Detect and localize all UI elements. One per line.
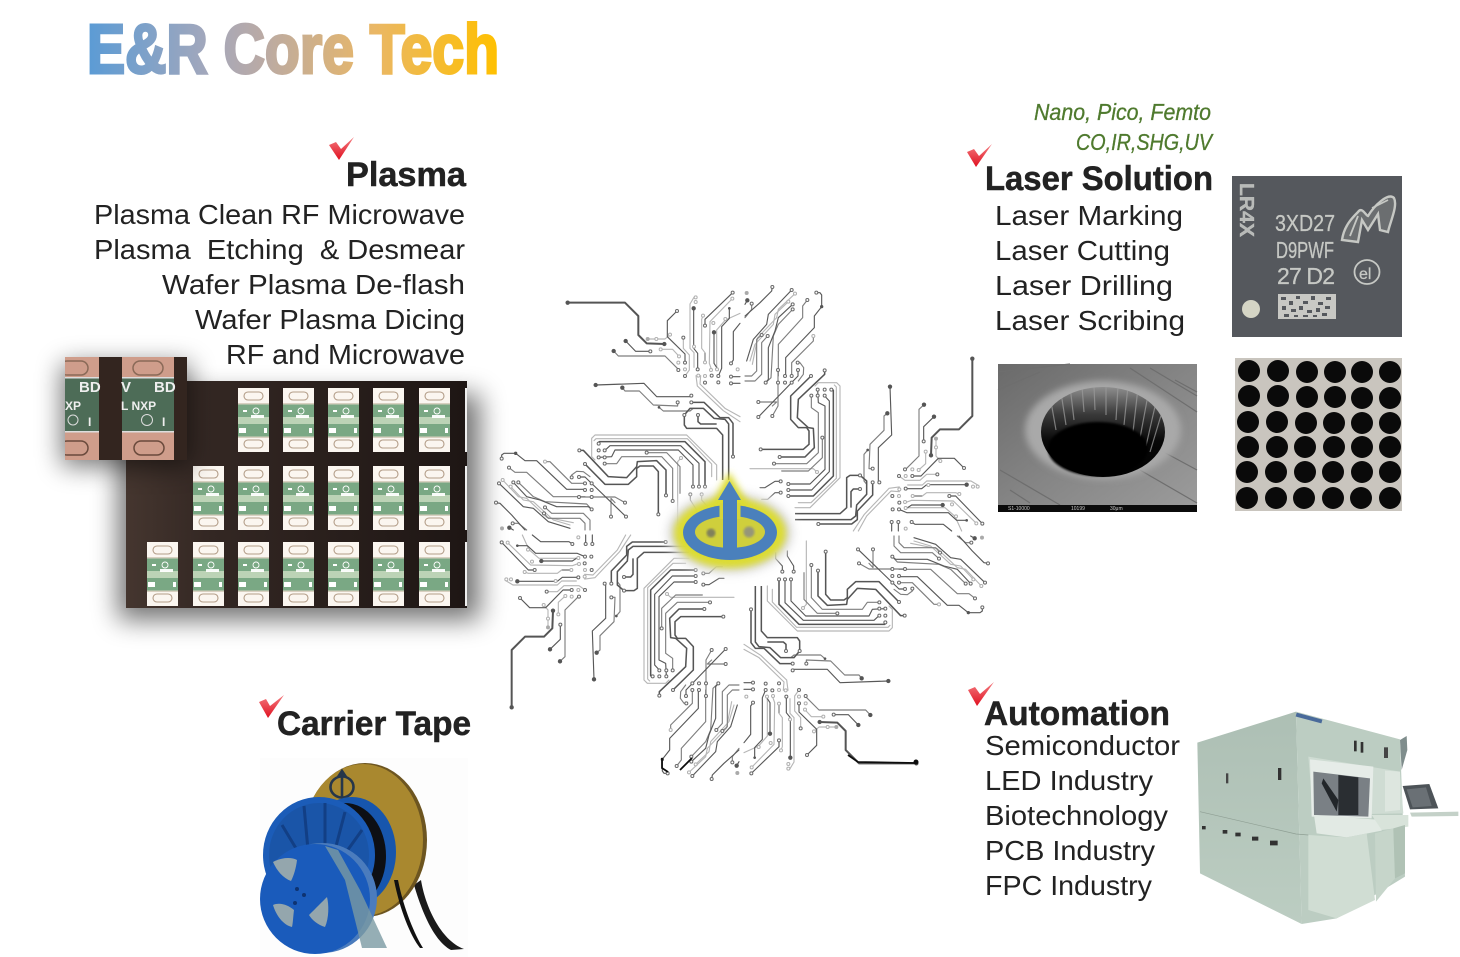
automation list: PCB Industry — [985, 835, 1155, 866]
laser list: Laser Scribing — [995, 305, 1185, 336]
photo: die close-up inset: BD — [154, 379, 176, 396]
photo: laser marked chip: D9PWF — [1276, 237, 1334, 263]
photo: laser drilled hole: 10199 — [1071, 506, 1085, 512]
photo: automation machine — [1197, 712, 1458, 924]
automation list: Semiconductor — [985, 730, 1180, 761]
laser list: Laser Cutting — [995, 235, 1170, 266]
automation list: LED Industry — [985, 765, 1153, 796]
icon: automation check mark — [968, 682, 994, 706]
note: laser pulse types: Nano, Pico, Femto — [1034, 99, 1211, 125]
photo: die close-up inset: XP — [65, 399, 81, 413]
title: E&R Core Tech — [87, 10, 499, 88]
note: laser pulse types — [1034, 99, 1214, 155]
photo: die close-up inset: I — [88, 415, 91, 429]
photo: die close-up inset: L NXP — [121, 399, 156, 413]
photo: laser marked chip: el — [1359, 266, 1371, 283]
heading: laser solution: Laser Solution — [985, 160, 1213, 198]
plasma list — [94, 199, 465, 370]
panel: laser solution — [967, 99, 1214, 336]
plasma list: Plasma Etching & Desmear — [94, 234, 465, 265]
photo: die close-up inset: V — [121, 379, 131, 396]
panel: automation — [968, 682, 1180, 901]
heading: automation: Automation — [984, 695, 1170, 733]
heading: plasma: Plasma — [346, 156, 467, 194]
automation list: FPC Industry — [985, 870, 1152, 901]
panel: carrier tape — [259, 695, 471, 743]
photo: laser marked chip — [1232, 176, 1402, 337]
icon: carrier tape check mark — [259, 695, 284, 718]
panel: plasma — [94, 137, 467, 370]
photo: drilled hole array — [1235, 358, 1402, 511]
photo: die close-up inset — [60, 357, 190, 466]
logo: power arrow with yellow glow — [666, 472, 794, 575]
photo: die close-up inset: BD — [79, 379, 101, 396]
photo: wafer dies — [118, 381, 480, 620]
laser list — [995, 200, 1185, 336]
photo: laser drilled hole — [998, 364, 1197, 512]
automation list: Biotechnology — [985, 800, 1168, 831]
automation list — [985, 730, 1180, 901]
plasma list: Plasma Clean RF Microwave — [94, 199, 465, 230]
icon: laser check mark — [967, 144, 992, 167]
heading: carrier tape: Carrier Tape — [277, 705, 471, 743]
laser list: Laser Marking — [995, 200, 1183, 231]
laser list: Laser Drilling — [995, 270, 1173, 301]
photo: die close-up inset: I — [162, 415, 165, 429]
photo: laser marked chip: LR4X — [1235, 183, 1257, 238]
plasma list: Wafer Plasma Dicing — [195, 304, 465, 335]
note: laser pulse types: CO,IR,SHG,UV — [1076, 129, 1214, 155]
photo: laser marked chip: 3XD27 — [1275, 210, 1335, 236]
photo: tape reels — [260, 758, 468, 957]
photo: laser drilled hole: S1-10000 — [1008, 506, 1030, 512]
photo: laser marked chip: 27 D2 — [1277, 263, 1335, 289]
plasma list: RF and Microwave — [226, 339, 465, 370]
plasma list: Wafer Plasma De-flash — [162, 269, 465, 300]
icon: plasma check mark — [329, 137, 354, 160]
photo: laser drilled hole: 30μm — [1110, 506, 1123, 512]
circuit board graphic — [494, 285, 990, 780]
